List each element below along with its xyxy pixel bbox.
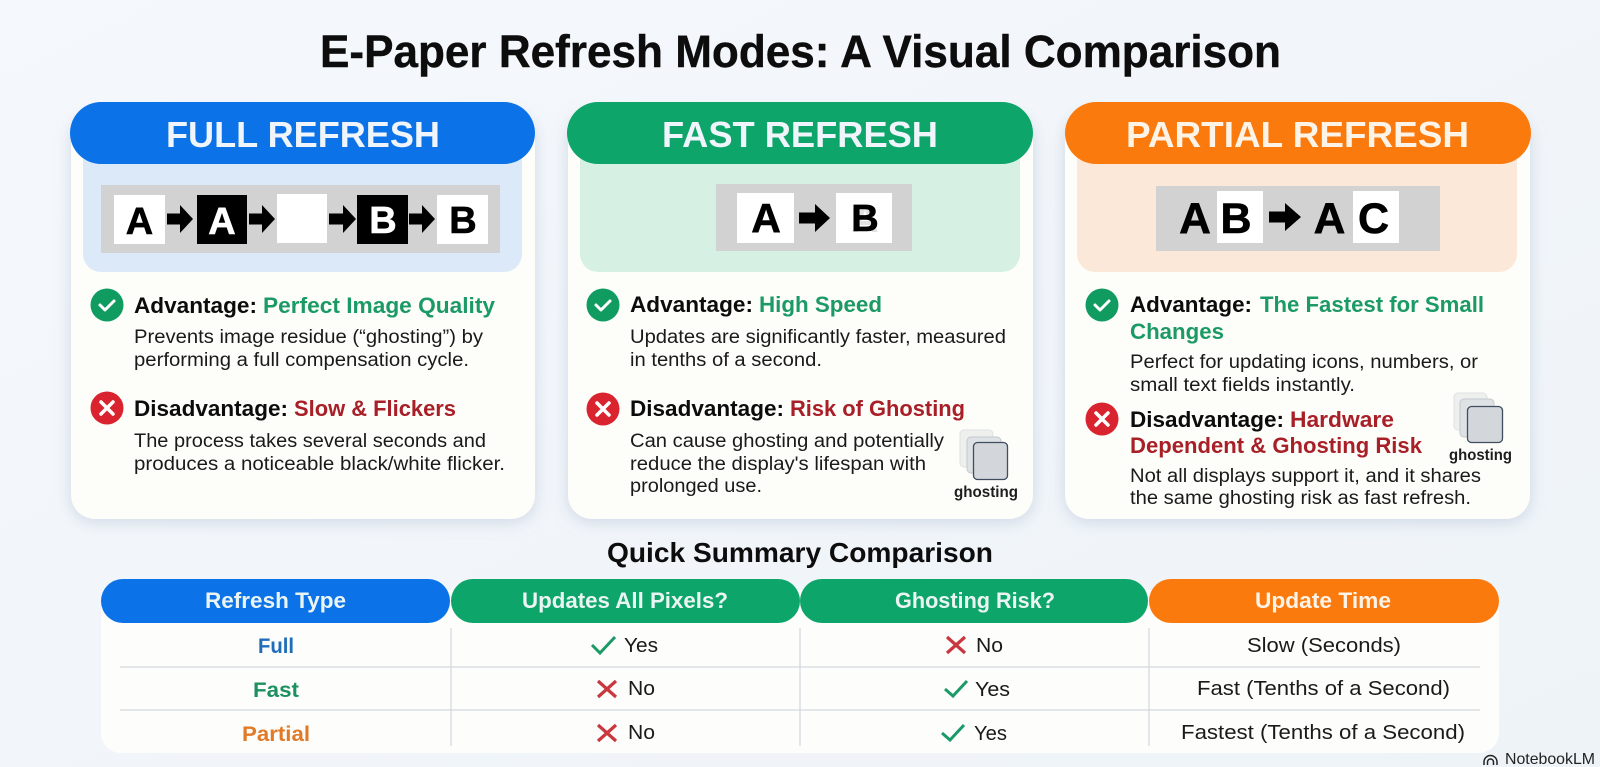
advantage text: The Fastest for Small: [1260, 292, 1484, 317]
disadvantage text: [134, 396, 505, 475]
header cell: ghosting risk: [800, 579, 1148, 623]
row: full: Full: [258, 635, 294, 658]
diagram: AB to AC: A: [1179, 194, 1211, 243]
row: fast: Fast (Tenths of a Second): [1197, 678, 1450, 700]
disadvantage text: Disadvantage:: [1130, 407, 1284, 432]
title: E-Paper Refresh Modes: A Visual Comparison: [320, 26, 1281, 77]
diagram: AB to AC: C: [1358, 195, 1389, 243]
icon: ghosting layers: [1449, 393, 1512, 464]
advantage text: Prevents image residue (“ghosting”) by: [134, 327, 484, 348]
row: full: Yes: [624, 635, 658, 657]
advantage text: [1130, 292, 1484, 396]
heading: fast refresh: FAST REFRESH: [662, 114, 938, 155]
diagram: AB to AC: B: [1220, 195, 1252, 243]
header cell: refresh type: Refresh Type: [205, 588, 346, 613]
disadvantage text: Can cause ghosting and potentially: [630, 431, 945, 452]
diagram: A to B full sequence: A: [126, 201, 153, 243]
row: fast: Fast: [253, 679, 299, 702]
advantage text: Perfect for updating icons, numbers, or: [1130, 352, 1479, 373]
diagram tint: [1077, 140, 1517, 272]
advantage text: High Speed: [759, 292, 882, 317]
icon: ghosting layers: [954, 430, 1018, 501]
card background: [71, 112, 535, 519]
row: partial: [242, 722, 1465, 746]
disadvantage text: [630, 396, 965, 497]
row: partial: Yes: [974, 723, 1007, 745]
card background: [568, 112, 1033, 519]
row: partial: Fastest (Tenths of a Second): [1181, 722, 1465, 744]
advantage text: Advantage:: [1130, 292, 1252, 317]
diagram: AB to AC: A: [1314, 194, 1345, 243]
disadvantage text: Slow & Flickers: [294, 396, 456, 421]
header cell: ghosting risk: Ghosting Risk?: [895, 588, 1055, 613]
disadvantage text: The process takes several seconds and: [134, 431, 486, 452]
header cell: updates all pixels: [451, 579, 800, 623]
row: fast: [253, 678, 1450, 702]
header cell: updates all pixels: Updates All Pixels?: [522, 588, 728, 613]
heading: full refresh: [70, 102, 535, 164]
diagram: AB to AC: [1156, 186, 1440, 251]
row: full: No: [976, 635, 1003, 657]
table rules: [120, 628, 1480, 746]
advantage text: [630, 292, 1006, 371]
row: fast: Yes: [975, 679, 1010, 701]
diagram: A to B full sequence: A: [208, 201, 236, 243]
disadvantage text: Hardware: [1290, 407, 1394, 432]
advantage text: small text fields instantly.: [1130, 375, 1355, 396]
diagram: A to B full sequence: [101, 185, 500, 253]
card background: [1065, 112, 1530, 519]
header cell: refresh type: [101, 579, 450, 623]
icon: disadvantage cross: [1086, 402, 1118, 436]
disadvantage text: reduce the display's lifespan with: [630, 454, 926, 475]
icon: disadvantage cross: [586, 392, 620, 426]
disadvantage text: Disadvantage:: [630, 396, 784, 421]
diagram: A to B: [716, 184, 912, 251]
diagram: A to B full sequence: B: [369, 200, 397, 242]
disadvantage text: [1130, 407, 1481, 509]
row: fast: No: [628, 678, 655, 700]
summary table: [101, 579, 1499, 753]
disadvantage text: the same ghosting risk as fast refresh.: [1130, 488, 1471, 509]
advantage text: Advantage:: [630, 292, 753, 317]
advantage text: Advantage:: [134, 293, 257, 318]
heading: partial refresh: PARTIAL REFRESH: [1126, 114, 1469, 155]
diagram: A to B: A: [851, 199, 879, 241]
heading: fast refresh: [567, 102, 1033, 164]
heading: partial refresh: [1065, 102, 1531, 164]
row: full: Slow (Seconds): [1247, 635, 1401, 657]
advantage text: Changes: [1130, 319, 1224, 344]
icon: disadvantage cross: [90, 392, 124, 424]
diagram: A to B full sequence: B: [449, 200, 477, 242]
disadvantage text: Dependent & Ghosting Risk: [1130, 433, 1422, 458]
advantage text: in tenths of a second.: [630, 350, 822, 371]
disadvantage text: Not all displays support it, and it shares: [1130, 466, 1481, 487]
row: full: [258, 635, 1401, 658]
table background: [101, 590, 1499, 753]
disadvantage text: Risk of Ghosting: [790, 396, 965, 421]
panel: partial refresh: [1065, 102, 1531, 519]
advantage text: Updates are significantly faster, measured: [630, 327, 1006, 348]
header cell: update time: Update Time: [1255, 588, 1391, 613]
icon: advantage check: [586, 288, 620, 322]
diagram tint: [83, 140, 522, 272]
heading: full refresh: FULL REFRESH: [166, 114, 440, 155]
header cell: update time: [1149, 579, 1499, 623]
diagram tint: [580, 140, 1020, 272]
table heading: Quick Summary Comparison: [607, 537, 993, 568]
panel: fast refresh: [567, 102, 1033, 519]
disadvantage text: Disadvantage:: [134, 396, 288, 421]
row: partial: Partial: [242, 723, 310, 746]
advantage text: [134, 293, 495, 371]
advantage text: performing a full compensation cycle.: [134, 350, 469, 371]
icon: advantage check: [90, 288, 124, 322]
row: partial: No: [628, 722, 655, 744]
disadvantage text: produces a noticeable black/white flicker.: [134, 454, 505, 475]
icon: ghosting layers: ghosting: [954, 484, 1018, 501]
panel: full refresh: [70, 102, 535, 519]
icon: advantage check: [1086, 288, 1118, 322]
disadvantage text: prolonged use.: [630, 476, 762, 497]
icon: ghosting layers: ghosting: [1449, 447, 1512, 464]
diagram: A to B: A: [751, 195, 781, 241]
diagram: A to B: B: [851, 198, 879, 240]
advantage text: Perfect Image Quality: [263, 293, 495, 318]
